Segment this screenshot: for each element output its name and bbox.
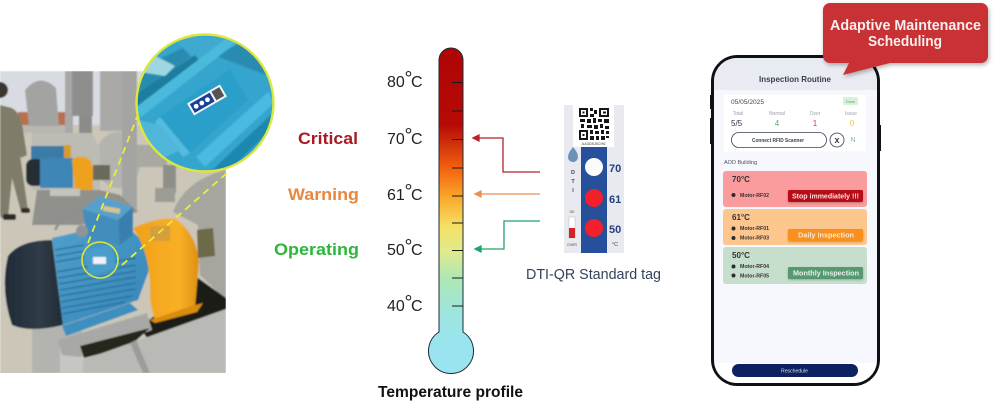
DTI vertical label: D	[571, 170, 575, 176]
summary card: 05/05/2025	[731, 99, 764, 106]
phone header: Inspection Routine	[759, 74, 831, 84]
temperature scale labels: C	[411, 242, 423, 259]
DTI-QR tag: OVER	[567, 243, 577, 247]
summary card: Normal	[769, 111, 785, 117]
summary card: 5/5	[731, 119, 743, 128]
DTI vertical label: T	[571, 179, 575, 185]
temperature scale labels: C	[411, 131, 423, 148]
motor body	[52, 226, 149, 325]
temperature scale labels: °	[404, 125, 412, 147]
OK/OVER indicator: OK	[569, 210, 575, 214]
temperature scale labels: C	[411, 74, 423, 91]
callout	[823, 3, 988, 75]
summary card: Total	[733, 111, 743, 117]
dark gap and beams	[140, 278, 226, 342]
status labels: Warning	[288, 185, 359, 204]
magnified lens showing tag on motor	[135, 28, 280, 175]
sky and background	[0, 71, 143, 126]
worker	[0, 105, 28, 218]
callout: Adaptive Maintenance	[830, 18, 981, 34]
drop logo	[568, 147, 578, 162]
photo: industrial motor with tag	[0, 71, 226, 375]
fan housing	[173, 170, 226, 300]
temperature scale labels: °	[404, 236, 412, 258]
NFC icon: N	[850, 137, 856, 144]
temperature scale labels: °	[404, 68, 412, 90]
summary card: 4	[775, 119, 780, 128]
blower housing	[95, 132, 141, 188]
temperature scale labels: 40	[387, 298, 405, 315]
summary card: 1	[813, 119, 818, 128]
phone	[710, 56, 881, 384]
status card: warning: Motor-RF03	[740, 236, 769, 242]
summary card: Issue	[845, 111, 857, 117]
callout: Scheduling	[868, 34, 942, 50]
status card: operating: Monthly Inspection	[793, 268, 859, 278]
DTI-QR tag: AA3D8J5CH6	[582, 142, 605, 146]
arrow: operating	[475, 221, 540, 252]
tag numbers	[609, 163, 621, 236]
shaft	[197, 228, 215, 258]
DTI-QR tag: °C	[612, 242, 618, 248]
thermometer caption: Temperature profile	[378, 384, 523, 401]
lower left structure	[32, 320, 82, 373]
status labels: Critical	[298, 129, 358, 148]
status card: operating	[723, 247, 867, 284]
phone: AOD Building	[724, 160, 757, 166]
arrow: warning	[475, 191, 540, 197]
arrow: critical	[473, 135, 540, 172]
temperature scale labels	[387, 68, 423, 315]
status card: critical	[723, 171, 867, 207]
status card: critical: 70°C	[732, 175, 750, 184]
summary card: 0	[850, 119, 855, 128]
status labels: Operating	[274, 240, 359, 259]
temperature scale labels: C	[411, 298, 423, 315]
QR code	[579, 108, 609, 140]
pipes	[64, 71, 74, 133]
small highlight circle	[82, 242, 118, 278]
summary card: Connect RFID Scanner	[752, 138, 804, 144]
tag caption: DTI-QR Standard tag	[526, 267, 661, 283]
status card: critical: Motor-RF02	[740, 193, 769, 199]
summary card: Done	[846, 100, 855, 104]
summary card: x	[834, 135, 840, 145]
summary card	[723, 94, 867, 152]
temperature scale labels: 70	[387, 131, 405, 148]
temperature scale labels: °	[404, 292, 412, 314]
terminal box	[82, 196, 133, 220]
tag numbers: 61	[609, 194, 621, 206]
rear motor	[31, 146, 71, 160]
temperature scale labels: 50	[387, 242, 405, 259]
silo	[25, 80, 59, 126]
motor back cover	[5, 240, 63, 329]
reschedule button: Reschedule	[781, 368, 808, 374]
temperature scale labels: C	[411, 187, 423, 204]
status labels	[274, 129, 359, 259]
temperature scale labels: 80	[387, 74, 405, 91]
status card: operating: 50°C	[732, 251, 750, 260]
DTI-QR tag	[564, 105, 624, 253]
tag numbers: 50	[609, 224, 621, 236]
yellow guard	[133, 218, 199, 322]
rear base	[32, 190, 138, 225]
status card: operating: Motor-RF04	[740, 264, 769, 270]
tag numbers: 70	[609, 163, 621, 175]
thermometer ticks	[452, 82, 463, 306]
status card: operating: Motor-RF05	[740, 274, 769, 280]
status card: critical: Stop immediately !!!	[792, 192, 859, 200]
tag plate on motor	[87, 248, 116, 274]
connect RFID button	[732, 132, 826, 148]
reschedule button	[732, 364, 858, 377]
status card: warning: Daily Inspection	[798, 230, 854, 240]
status card: warning	[723, 209, 867, 245]
temperature scale labels: °	[404, 181, 412, 203]
DTI vertical label	[571, 170, 575, 194]
pressure gauge	[76, 225, 88, 237]
magnified detail lines	[88, 117, 227, 265]
temperature scale labels: 61	[387, 187, 405, 204]
indicator dots	[585, 158, 603, 176]
scanner icon	[830, 133, 844, 147]
status card: warning: 61°C	[732, 213, 750, 222]
DTI vertical label: I	[572, 188, 574, 194]
thermometer	[428, 48, 474, 374]
summary card: Over	[810, 111, 821, 117]
phone side buttons	[710, 95, 881, 151]
status card: warning: Motor-RF01	[740, 226, 769, 232]
tag on motor close-up	[187, 84, 227, 116]
